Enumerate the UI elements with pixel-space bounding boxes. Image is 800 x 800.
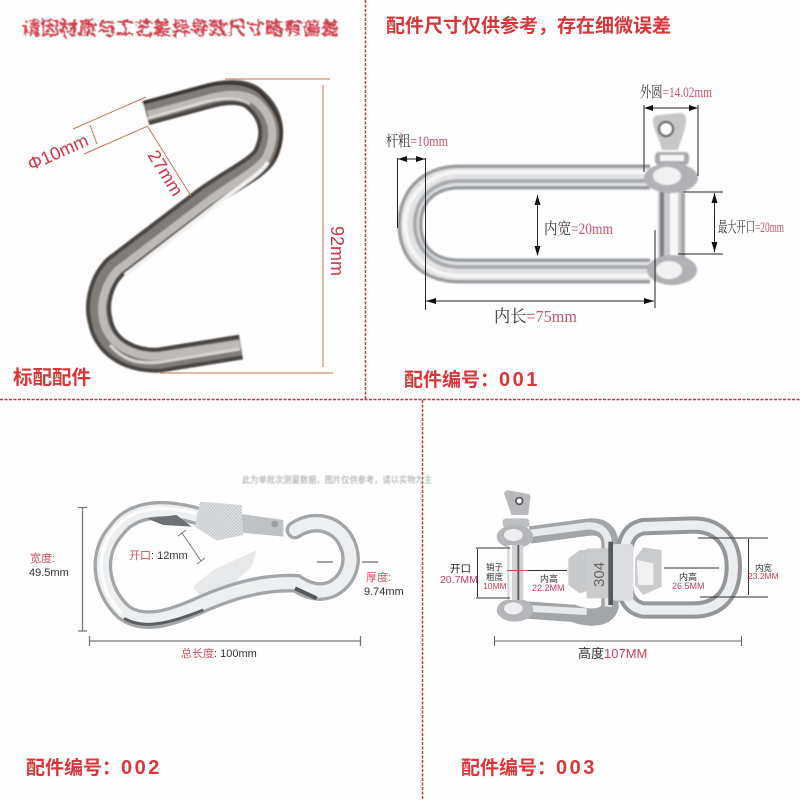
- engraved 304 mark: 304: [591, 562, 608, 587]
- dimension: inner height 22.2mm: [528, 570, 567, 593]
- faint grey note: 此为单批次测量数据，图片仅供参考，请以实物为主: [242, 474, 432, 485]
- dimension: total length 100mm: 总长度: 100mm: [181, 646, 257, 660]
- dimension: inner width 23.2mm: [698, 538, 779, 597]
- panel: accessory 002 carabiner: [26, 474, 432, 779]
- dimension: total length 100mm: [89, 636, 361, 660]
- dimension: total height 107mm: [494, 636, 742, 661]
- dimension: inner width 23.2mm: 23.2MM: [748, 571, 779, 581]
- dimension: diameter 10mm: Φ10mm: [24, 130, 91, 175]
- dimension: bar thickness 10mm: 杆粗=10mm: [386, 133, 448, 150]
- dimension: inner width 20mm: [534, 195, 613, 256]
- label: accessory number 003: 配件编号：003: [461, 756, 597, 779]
- dimension: inner length 75mm: [426, 230, 655, 326]
- panel: standard S-hook: [13, 18, 347, 389]
- icon: S-hook photo: [99, 83, 281, 363]
- dimension: opening 27mm: [144, 127, 191, 200]
- dimension: width 49.5mm: 49.5mm: [29, 567, 69, 579]
- label: accessory number 001: 配件编号：001: [404, 368, 540, 391]
- dimension: inner height 22.2mm: 内高: [540, 573, 558, 584]
- label: standard accessory: 标配配件: [13, 367, 91, 389]
- dimension: height 92mm: [160, 79, 347, 373]
- dimension: opening 12mm: 开口: 12mm: [129, 550, 188, 562]
- dimension: inner height 22.2mm: 22.2MM: [532, 583, 565, 593]
- dimension: inner height 26.5mm: [664, 568, 719, 591]
- dimension: inner width 23.2mm: 内宽: [755, 563, 773, 573]
- red heading note: 配件尺寸仅供参考，存在细微误差: [386, 14, 671, 37]
- dimension: pin thickness 10mm: [483, 562, 528, 591]
- dimension: opening 12mm: [129, 530, 205, 564]
- dimension: height 92mm: 92mm: [327, 226, 347, 276]
- dimension: inner height 26.5mm: 26.5MM: [672, 581, 705, 591]
- dimension: diameter 10mm: [24, 97, 148, 175]
- dimension: inner length 75mm: 内长=75mm: [494, 307, 577, 326]
- dimension: opening 20.7mm: [440, 548, 510, 598]
- garbled red heading: 请因材质与工艺差异导致尺寸略有偏差: [22, 18, 340, 39]
- dimension: opening 20.7mm: 开口: [450, 563, 471, 575]
- dimension: pin thickness 10mm: 粗度: [486, 572, 504, 582]
- panel: accessory 003 swivel: [440, 490, 779, 779]
- dimension: total height 107mm: 高度107MM: [578, 646, 647, 661]
- dimension: opening 27mm: 27mm: [144, 147, 187, 200]
- dimension: outer circle 14.02mm: [640, 84, 712, 176]
- icon: carabiner photo: [101, 502, 351, 624]
- dimension: thickness 9.74mm: [317, 562, 404, 598]
- dimension: thickness 9.74mm: 厚度:: [366, 570, 391, 584]
- dimension: pin thickness 10mm: 销子: [486, 562, 504, 572]
- icon: swivel shackle photo: [497, 490, 733, 622]
- dimension: opening 20.7mm: 20.7MM: [440, 574, 478, 586]
- icon: long D-shackle photo: [405, 113, 698, 285]
- dimension: inner width 20mm: 内宽=20mm: [544, 220, 613, 238]
- dimension: pin thickness 10mm: 10MM: [483, 581, 507, 591]
- dimension: max opening 20mm: [678, 192, 784, 254]
- dimension: width 49.5mm: [29, 507, 87, 631]
- panel: accessory 001 D-shackle: [386, 14, 784, 391]
- dimension: outer circle 14.02mm: 外圆=14.02mm: [640, 84, 712, 101]
- label: accessory number 002: 配件编号：002: [26, 756, 162, 779]
- dimension: inner height 26.5mm: 内高: [679, 571, 697, 582]
- dimension: thickness 9.74mm: 9.74mm: [364, 586, 404, 598]
- dimension: width 49.5mm: 宽度:: [30, 551, 55, 565]
- dimension: max opening 20mm: 最大开口=20mm: [718, 219, 784, 236]
- dimension: bar thickness 10mm: [386, 133, 448, 310]
